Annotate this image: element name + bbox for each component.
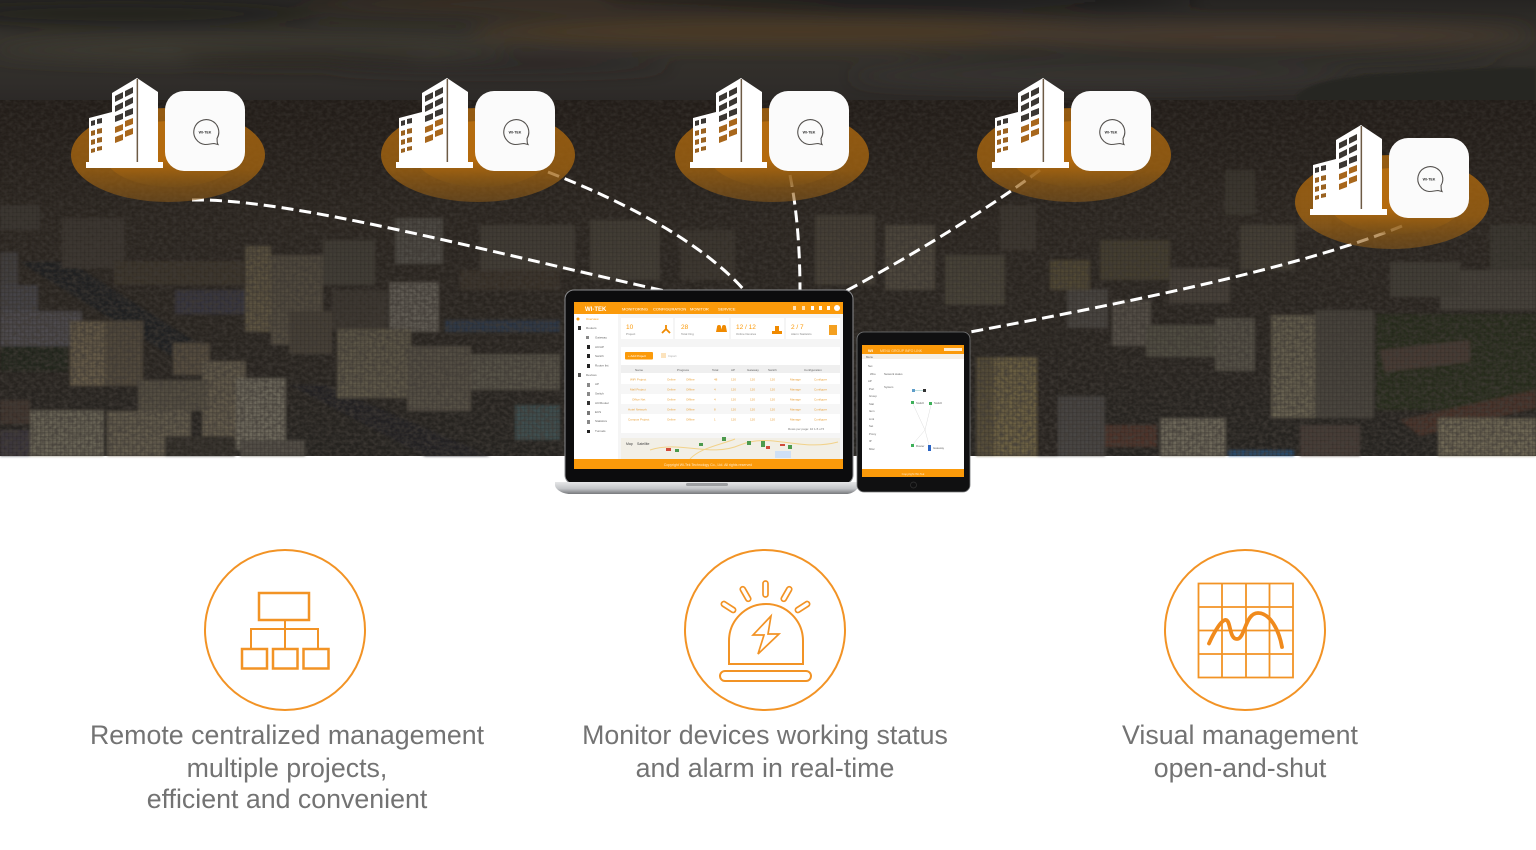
caption: remote centralized management: Remote centralized management bbox=[90, 720, 485, 750]
dashboard stat cards: 28 bbox=[681, 324, 689, 331]
tablet with topology view: AP bbox=[868, 379, 872, 383]
icon: alarm beacon in circle bbox=[685, 550, 845, 710]
tablet with topology view: Set bbox=[869, 424, 873, 428]
tablet with topology view: IP bbox=[869, 439, 872, 443]
dashboard project table: 120 bbox=[750, 408, 755, 412]
device node 3: building and access point: WI-TEK bbox=[803, 130, 816, 134]
dashboard project table: Manage bbox=[790, 388, 801, 392]
tablet with topology view: MENU GROUP INFO LINK bbox=[880, 349, 923, 353]
dashboard project table: 120 bbox=[770, 378, 775, 382]
dashboard stat cards: Alarm Statistics bbox=[791, 332, 812, 336]
dashboard project table: Configure bbox=[814, 398, 827, 402]
dashboard header bar: CONFIGURATION bbox=[653, 306, 686, 312]
dashboard project table: Manage bbox=[790, 408, 801, 412]
dashboard project table: Rows per page: 10 1-5 of 5 bbox=[788, 427, 825, 431]
dashboard project table: Progress bbox=[677, 368, 690, 372]
dashboard sidebar: Router list bbox=[595, 364, 609, 368]
dashboard project table: Offline bbox=[686, 398, 695, 402]
tablet with topology view: Item bbox=[869, 409, 875, 413]
dashboard footer bar bbox=[574, 459, 843, 469]
device node 5: building and access point bbox=[1295, 125, 1489, 249]
dashboard project table: 120 bbox=[770, 398, 775, 402]
dashboard project table: WiFi Project bbox=[630, 378, 646, 382]
dashboard project table: Configure bbox=[814, 388, 827, 392]
tablet with topology view: Proxy bbox=[869, 432, 877, 436]
device node 5: building and access point: WI-TEK bbox=[1423, 178, 1436, 182]
dashboard project table: Gateway bbox=[747, 368, 759, 372]
dashboard header bar: WI-TEK bbox=[585, 307, 607, 313]
dashboard project table: AP bbox=[731, 368, 735, 372]
dashboard project table: 120 bbox=[731, 408, 736, 412]
dashboard stat cards: 2 / 7 bbox=[791, 324, 804, 331]
device node 1: building and access point bbox=[71, 78, 265, 202]
caption: remote centralized management: efficient and convenient bbox=[147, 784, 428, 814]
dashboard project table: 120 bbox=[750, 388, 755, 392]
dashboard project table: 120 bbox=[770, 408, 775, 412]
tablet with topology view: Misc bbox=[869, 447, 875, 451]
tablet with topology view: Group bbox=[869, 394, 877, 398]
device node 4: building and access point: WI-TEK bbox=[1105, 130, 1118, 134]
dashboard project table: Configure bbox=[814, 378, 827, 382]
dashboard header bar bbox=[574, 302, 843, 314]
dashboard stat cards: Online Devices bbox=[736, 332, 757, 336]
tablet with topology view: Gateway bbox=[933, 446, 945, 450]
dashboard project table: Offline bbox=[686, 388, 695, 392]
tablet with topology view bbox=[857, 332, 970, 492]
left district bbox=[0, 343, 68, 371]
dashboard sidebar: Gateway bbox=[595, 336, 607, 340]
tablet with topology view: Port bbox=[869, 387, 874, 391]
dashboard sidebar bbox=[574, 314, 618, 459]
dashboard project table: Online bbox=[667, 408, 676, 412]
tablet with topology view: Menu bbox=[866, 355, 873, 359]
dashboard footer bar: Copyright Wi-Tek Technology Co., Ltd. All rights reserved bbox=[664, 463, 752, 467]
dashboard project table: Configure bbox=[814, 418, 827, 422]
dashboard project table: Online bbox=[667, 418, 676, 422]
dashboard project table: 4 bbox=[714, 398, 716, 402]
device node 2: building and access point: WI-TEK bbox=[509, 130, 522, 134]
dashboard sidebar: AP bbox=[595, 382, 599, 386]
dashboard project table: Mall Project bbox=[630, 388, 646, 392]
dashboard project table: 8 bbox=[714, 408, 716, 412]
dashboard project table: Configuration bbox=[804, 368, 822, 372]
dashboard sidebar: Overview bbox=[586, 317, 599, 321]
dashboard project table: Import bbox=[668, 354, 677, 358]
dashboard project table: Configure bbox=[814, 408, 827, 412]
dashboard project table: Offline bbox=[686, 418, 695, 422]
dashboard stat cards: 10 bbox=[626, 324, 634, 331]
dashboard sidebar: Routers bbox=[586, 326, 597, 330]
dashboard sidebar: Switch bbox=[595, 392, 604, 396]
dashboard project table: 120 bbox=[731, 418, 736, 422]
dashboard project table: + Add Project bbox=[628, 354, 646, 358]
dashboard header bar: MONITORING bbox=[622, 306, 648, 312]
dashboard project table: Manage bbox=[790, 418, 801, 422]
dashboard project table: 120 bbox=[750, 418, 755, 422]
tablet with topology view: Router bbox=[916, 444, 924, 448]
caption: visual management: open-and-shut bbox=[1154, 753, 1327, 783]
dashboard project table: 120 bbox=[770, 388, 775, 392]
laptop base bbox=[555, 482, 858, 494]
dashboard project table: 120 bbox=[731, 398, 736, 402]
icon: organisation chart in circle bbox=[205, 550, 365, 710]
dashboard project table: Online bbox=[667, 388, 676, 392]
dashboard project table: Campus Project bbox=[628, 418, 650, 422]
dashboard stat cards: 12 / 12 bbox=[736, 324, 756, 331]
dashboard map: Map bbox=[626, 442, 633, 446]
dashboard project table: Switch bbox=[768, 368, 777, 372]
dashboard project table: 120 bbox=[750, 378, 755, 382]
photo background: dusk city skyline bbox=[0, 0, 1536, 456]
tablet with topology view: Copyright Wi-Tek bbox=[902, 472, 925, 476]
dashboard header bar: MONITOR bbox=[690, 306, 709, 312]
caption: monitor devices: and alarm in real-time bbox=[636, 753, 894, 783]
dashboard project table: Offline bbox=[686, 378, 695, 382]
dashboard project table: Manage bbox=[790, 398, 801, 402]
tablet with topology view: Switch bbox=[934, 401, 943, 405]
dashboard stat cards: Project bbox=[626, 332, 636, 336]
icon: line chart on grid in circle bbox=[1165, 550, 1325, 710]
tablet with topology view: Wire bbox=[870, 372, 876, 376]
dashboard project table: 120 bbox=[731, 388, 736, 392]
dashboard sidebar: AC/Router bbox=[595, 401, 609, 405]
dashboard sidebar: Statistics bbox=[595, 419, 608, 423]
dashboard project table bbox=[621, 347, 840, 433]
dashboard project table: Manage bbox=[790, 378, 801, 382]
dashboard header bar: SERVICE bbox=[718, 306, 736, 312]
dashed connector lines bbox=[192, 170, 1402, 332]
dashboard project table: 4 bbox=[714, 388, 716, 392]
dashboard project table: Hotel Network bbox=[628, 408, 647, 412]
tablet with topology view: Stat bbox=[869, 402, 874, 406]
dashboard project table: 1 bbox=[714, 418, 716, 422]
dashboard sidebar: Switch bbox=[595, 354, 604, 358]
centre district bbox=[480, 225, 575, 270]
dashboard project table: Online bbox=[667, 378, 676, 382]
device node 2: building and access point bbox=[381, 78, 575, 202]
dashboard project table: Total bbox=[712, 368, 719, 372]
caption: remote centralized management: multiple projects, bbox=[187, 753, 387, 783]
dashboard map bbox=[621, 437, 840, 459]
device node 3: building and access point bbox=[675, 78, 869, 202]
dashboard sidebar: Devices bbox=[586, 373, 597, 377]
tablet with topology view: System bbox=[884, 385, 894, 389]
right district bbox=[1376, 314, 1536, 410]
device node 1: building and access point: WI-TEK bbox=[199, 130, 212, 134]
device node 4: building and access point bbox=[977, 78, 1171, 202]
dashboard project table: Online bbox=[667, 398, 676, 402]
tablet with topology view: Link bbox=[869, 417, 875, 421]
dashboard project table: 48 bbox=[714, 378, 718, 382]
dashboard project table: Name bbox=[635, 368, 643, 372]
tablet with topology view: Net bbox=[868, 364, 873, 368]
dashboard sidebar: AC/AP bbox=[595, 345, 604, 349]
caption: visual management: Visual management bbox=[1122, 720, 1359, 750]
dashboard stat cards: Total Ong bbox=[681, 332, 694, 336]
dashboard sidebar: ECS bbox=[595, 410, 601, 414]
dashboard project table: Offline bbox=[686, 408, 695, 412]
dashboard stat cards bbox=[621, 318, 840, 339]
dashboard project table: Office Net bbox=[632, 398, 645, 402]
tablet with topology view: Switch bbox=[916, 401, 925, 405]
caption: monitor devices: Monitor devices working status bbox=[582, 720, 948, 750]
laptop with dashboard bbox=[555, 290, 858, 494]
dashboard sidebar: Tunnels bbox=[595, 429, 606, 433]
tablet with topology view: Network status bbox=[884, 372, 903, 376]
dashboard project table: 120 bbox=[750, 398, 755, 402]
dashboard project table: 120 bbox=[770, 418, 775, 422]
tablet with topology view: WI bbox=[868, 348, 873, 353]
dashboard project table: 120 bbox=[731, 378, 736, 382]
dashboard map: Satellite bbox=[637, 442, 650, 446]
